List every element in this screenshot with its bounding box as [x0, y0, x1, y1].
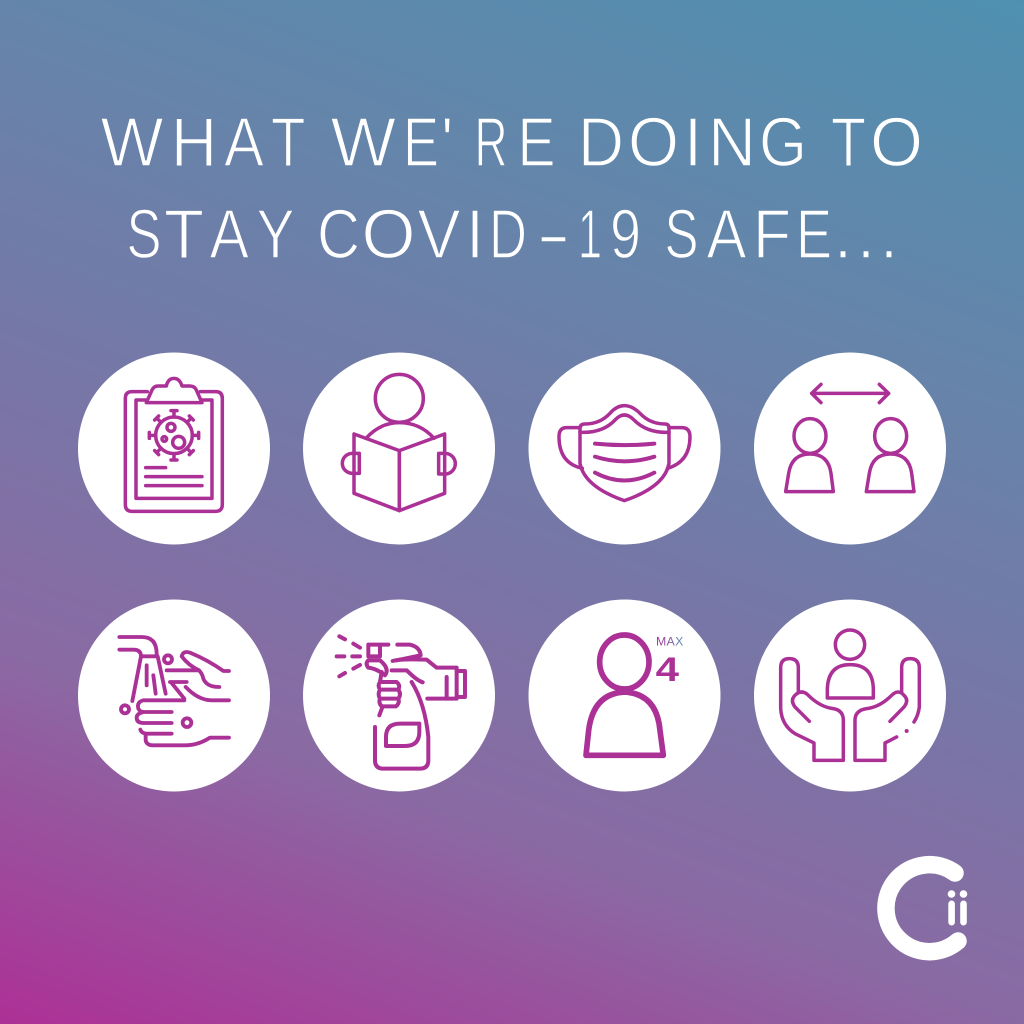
icon: face mask: [528, 352, 720, 544]
title: O: [362, 195, 416, 273]
title: E: [518, 103, 556, 181]
icon: clipboard with virus report: [78, 352, 270, 544]
title: 1: [578, 195, 602, 273]
title: .: [857, 195, 875, 273]
logo: Cii: [886, 865, 967, 952]
title: W: [100, 103, 164, 181]
title: I: [684, 103, 702, 181]
title: A: [224, 103, 264, 181]
icon: two people distancing with arrow: [754, 352, 946, 544]
title: C: [317, 195, 360, 273]
icon: hand washing under tap: [78, 600, 270, 792]
title: Y: [256, 195, 294, 273]
title: O: [628, 103, 679, 181]
title: H: [171, 103, 217, 181]
title: T: [831, 103, 866, 181]
title: -: [536, 195, 571, 273]
title: E: [403, 103, 439, 181]
title: S: [664, 195, 698, 273]
icon: person with max 4 limit: [528, 600, 720, 792]
title: D: [578, 103, 624, 181]
icon: person reading a book: [303, 352, 495, 544]
icon: person with max 4 limit: 4: [656, 651, 679, 689]
title: [100, 103, 923, 273]
title: D: [489, 195, 527, 273]
title: A: [706, 195, 747, 273]
title: F: [753, 195, 791, 273]
icon: hands supporting a person: [754, 600, 946, 792]
title: .: [880, 195, 898, 273]
title: W: [330, 103, 396, 181]
title: N: [708, 103, 756, 181]
title: G: [759, 103, 807, 181]
title: V: [418, 195, 461, 273]
title: S: [126, 195, 162, 273]
title: T: [271, 103, 305, 181]
title: .: [834, 195, 852, 273]
icon: hand holding spray bottle: [303, 600, 495, 792]
title: E: [796, 195, 832, 273]
title: T: [164, 195, 204, 273]
title: 9: [610, 195, 641, 273]
icon: person with max 4 limit: MAX: [656, 634, 683, 648]
title: O: [870, 103, 923, 181]
title: I: [466, 195, 484, 273]
title: R: [474, 103, 508, 181]
title: ': [441, 103, 453, 181]
title: A: [210, 195, 249, 273]
